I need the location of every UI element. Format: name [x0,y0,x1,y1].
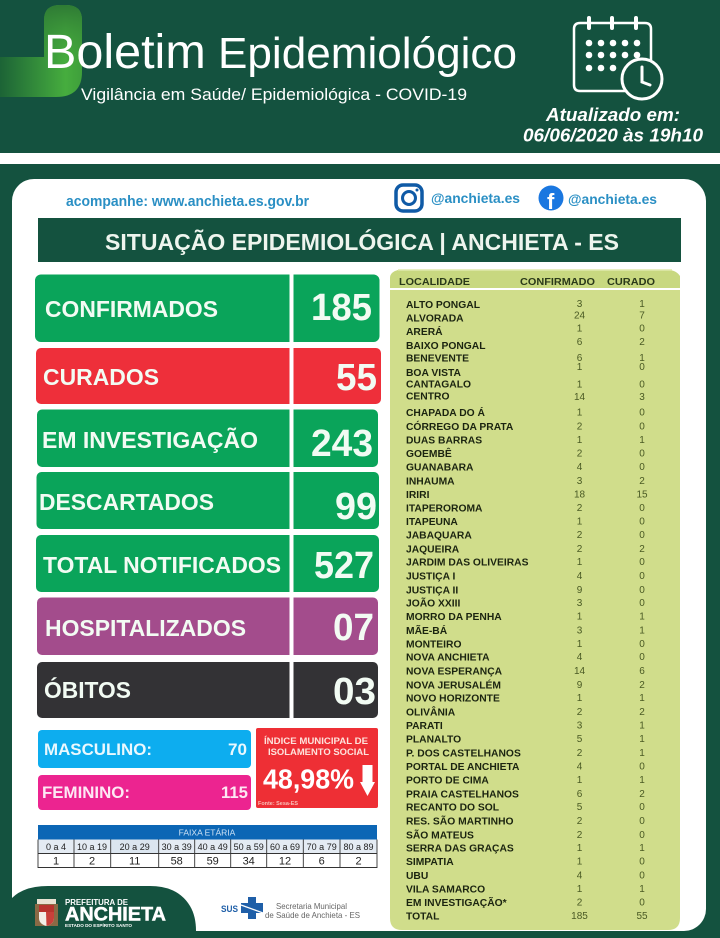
card: curados: CURADOS [43,364,159,390]
locality names: BOA VISTA [406,368,461,379]
age table: 59 [207,856,219,868]
cured counts: 1 [639,843,645,854]
locality names: NOVA ESPERANÇA [406,667,503,678]
confirmed counts: 2 [577,530,583,541]
locality names: P. DOS CASTELHANOS [406,748,521,759]
locality names: PORTAL DE ANCHIETA [406,762,520,773]
gender: masculino: MASCULINO: [44,740,152,759]
confirmed counts: 1 [577,693,583,704]
locality names: DUAS BARRAS [406,435,482,446]
confirmed counts: 3 [577,720,583,732]
callout: social isolation index: ÍNDICE MUNICIPAL DE [264,736,368,747]
gender: masculino: 70 [228,740,247,759]
locality names: ITAPEUNA [406,517,458,528]
locality names: RES. SÃO MARTINHO [406,814,514,827]
age table: 60 a 69 [270,842,300,852]
card: curados [36,348,381,404]
table: cases by locality [390,270,680,930]
icon: instagram [396,185,422,211]
locality names: ALTO PONGAL [406,300,480,311]
cured counts: 1 [639,748,645,759]
table header [399,276,655,288]
confirmed counts: 5 [577,734,583,745]
locality names: PLANALTO [406,735,461,746]
card: hospitalizados [37,597,378,655]
card: confirmados: CONFIRMADOS [45,296,218,322]
cured counts: 0 [639,585,645,596]
confirmed counts: 6 [577,337,583,348]
age table: 30 a 39 [162,842,192,852]
cured counts: 1 [639,734,645,745]
card: hospitalizados: HOSPITALIZADOS [45,615,246,641]
confirmed counts: 1 [577,639,583,650]
cured counts: 3 [639,392,645,403]
table header: LOCALIDADE [399,276,470,288]
cured counts: 0 [639,462,645,473]
locality names: NOVA JERUSALÉM [406,678,501,691]
locality names: JAQUEIRA [406,544,460,555]
confirmed counts: 4 [577,870,583,882]
confirmed counts: 1 [577,557,583,568]
card: descartados [36,472,379,529]
cured counts: 1 [639,435,645,446]
locality names: ARERÁ [406,325,443,338]
locality names: CÓRREGO DA PRATA [406,420,514,433]
icon: facebook [538,186,564,214]
locality names: EM INVESTIGAÇÃO* [406,896,507,909]
cured counts: 0 [639,422,645,432]
header band [0,0,720,164]
callout: social isolation index: ISOLAMENTO SOCIAL [268,747,369,758]
cured counts: 55 [636,911,648,922]
locality names: TOTAL [406,912,439,923]
age table: 34 [243,856,255,868]
cured counts: 0 [639,571,645,582]
confirmed counts: 9 [577,680,583,691]
confirmed counts: 9 [577,585,583,596]
age table: 10 a 19 [77,842,107,852]
gender: feminino [38,775,251,810]
locality names: NOVO HORIZONTE [406,693,500,704]
cured counts: 1 [639,693,645,704]
cured counts: 0 [639,816,645,827]
confirmed counts: 4 [577,462,583,473]
cured counts [636,299,648,922]
gender: feminino: FEMININO: [42,783,130,802]
cured counts: 7 [639,310,645,322]
age table: 80 a 89 [343,842,374,852]
locality names: PRAIA CASTELHANOS [406,789,519,800]
card: total notificados: TOTAL NOTIFICADOS [43,552,281,578]
subtitle: Vigilância em Saúde/ Epidemiológica - COVID-19 [81,86,467,104]
locality names: RECANTO DO SOL [406,803,499,814]
confirmed counts: 3 [577,598,583,609]
confirmed counts: 1 [577,884,583,895]
confirmed counts: 4 [577,762,583,772]
confirmed counts: 2 [577,898,583,908]
locality names: JABAQUARA [406,530,472,541]
confirmed counts [571,299,588,922]
cured counts: 0 [639,598,645,609]
prefeitura wordmark: ANCHIETA [65,904,166,926]
cured counts: 0 [639,639,645,650]
confirmed counts: 14 [574,666,585,677]
card: óbitos: ÓBITOS [44,676,131,703]
sus logo and health secretariat: SUS [221,904,238,914]
sus logo and health secretariat: de Saúde de Anchieta - ES [265,910,360,920]
confirmed counts: 1 [577,380,583,390]
locality names: GOEMBÊ [406,447,452,460]
locality names: MÃE-BÁ [406,624,448,637]
confirmed counts: 6 [577,353,583,364]
locality names: CENTRO [406,391,449,402]
confirmed counts: 3 [577,299,583,310]
locality names: CHAPADA DO Á [406,406,486,419]
prefeitura wordmark [65,898,166,928]
age table: 58 [171,856,183,868]
cured counts: 1 [639,612,645,622]
confirmed counts: 24 [574,310,585,322]
confirmed counts: 5 [577,802,583,813]
confirmed counts: 1 [577,362,583,373]
locality names: MONTEIRO [406,639,462,650]
callout: social isolation index [256,728,378,808]
confirmed counts: 1 [577,856,583,868]
locality names: NOVA ANCHIETA [406,653,490,664]
confirmed counts: 185 [571,911,588,922]
confirmed counts: 2 [577,448,583,460]
card: confirmados [35,274,380,342]
confirmed counts: 2 [577,816,583,827]
cured counts: 0 [639,448,645,460]
confirmed counts: 1 [577,843,583,854]
gender: feminino: 115 [221,783,248,802]
cured counts: 0 [639,530,645,541]
green logo shape [0,5,82,97]
cured counts: 2 [639,707,645,718]
locality names [406,300,529,923]
age table: 6 [319,856,325,868]
callout: social isolation index: Fonte: Sesa-ES [258,801,299,807]
cured counts: 0 [639,870,645,882]
cured counts: 0 [639,516,645,528]
cured counts: 1 [639,299,645,310]
confirmed counts: 4 [577,571,583,582]
card: em investigação: EM INVESTIGAÇÃO [42,426,258,453]
locality names: MORRO DA PENHA [406,612,502,623]
age table: 2 [355,856,362,868]
confirmed counts: 2 [577,748,583,759]
title [44,25,517,79]
cured counts: 2 [639,789,645,800]
age table: 0 a 4 [46,842,66,852]
age table: FAIXA ETÁRIA [179,828,236,838]
confirmed counts: 2 [577,707,583,718]
confirmed counts: 3 [577,476,583,487]
locality names: SERRA DAS GRAÇAS [406,844,514,855]
update date: 06/06/2020 às 19h10 [523,124,704,146]
card: óbitos [37,662,378,718]
confirmed counts: 2 [577,422,583,432]
card: descartados: 99 [335,486,377,528]
prefeitura wordmark: ESTADO DO ESPÍRITO SANTO [65,921,133,928]
cured counts: 0 [639,856,645,868]
instagram handle: @anchieta.es [431,190,520,206]
card: em investigação: 243 [311,423,373,465]
cured counts: 0 [639,362,645,373]
icon: calendar with clock [574,18,662,99]
locality names: JARDIM DAS OLIVEIRAS [406,558,529,569]
locality names: BAIXO PONGAL [406,341,486,352]
locality names: INHAUMA [406,476,455,487]
update date [523,104,704,146]
locality names: JUSTIÇA II [406,585,458,596]
section title bar: SITUAÇÃO EPIDEMIOLÓGICA | ANCHIETA - ES [105,228,619,255]
card: curados: 55 [336,357,377,399]
cured counts: 2 [639,680,645,691]
confirmed counts: 18 [574,490,585,500]
locality names: PORTO DE CIMA [406,775,489,786]
title: Epidemiológico [218,29,517,78]
age table: 12 [279,856,291,868]
age table: 1 [53,856,59,868]
locality names: CANTAGALO [406,379,471,390]
locality names: OLIVÂNIA [406,706,456,719]
sus logo and health secretariat: Secretaria Municipal [276,901,347,911]
locality names: PARATI [406,721,443,732]
confirmed counts: 4 [577,652,583,663]
locality names: SÃO MATEUS [406,828,474,841]
locality names: SIMPATIA [406,857,454,868]
confirmed counts: 1 [577,612,583,622]
card: óbitos: 03 [333,671,376,713]
confirmed counts: 1 [577,324,583,334]
cured counts: 1 [639,720,645,732]
locality names: GUANABARA [406,463,474,474]
confirmed counts: 1 [577,408,583,418]
cured counts: 0 [639,503,645,514]
cured counts: 1 [639,626,645,636]
gender: masculino [38,730,251,768]
age table: 20 a 29 [120,842,150,852]
age table: 70 a 79 [307,842,337,852]
cured counts: 0 [639,762,645,772]
stat cards [35,274,381,718]
confirmed counts: 2 [577,503,583,514]
cured counts: 2 [639,544,645,555]
age table [38,825,377,868]
icon: coat of arms [35,899,58,926]
cured counts: 0 [639,802,645,813]
white content panel [12,179,706,931]
card: confirmados: 185 [311,287,372,329]
follow line [66,185,657,214]
locality names: UBU [406,871,428,882]
cured counts: 0 [639,557,645,568]
cured counts: 6 [639,666,645,677]
cured counts: 1 [639,884,645,895]
cured counts: 0 [639,898,645,908]
card: em investigação [37,409,378,467]
cured counts: 15 [636,490,648,500]
locality names: JOÃO XXIII [406,597,460,610]
table header: CURADO [607,276,655,288]
icon: facebook: f [547,189,555,214]
confirmed counts: 1 [577,516,583,528]
confirmed counts: 2 [577,544,583,555]
cured counts: 2 [639,476,645,487]
title: Boletim [44,25,206,79]
locality names: JUSTIÇA I [406,571,456,582]
website link: acompanhe: www.anchieta.es.gov.br [66,193,309,210]
table header: CONFIRMADO [520,276,595,288]
locality names: VILA SAMARCO [406,884,485,895]
age table: 11 [129,856,140,868]
confirmed counts: 2 [577,830,583,841]
cured counts: 1 [639,353,645,364]
card: descartados: DESCARTADOS [39,489,214,515]
prefeitura wordmark: PREFEITURA DE [65,898,129,907]
confirmed counts: 6 [577,789,583,800]
section title bar [38,218,681,262]
facebook handle: @anchieta.es [568,191,657,207]
cured counts: 0 [639,324,645,334]
locality names: ITAPEROROMA [406,504,483,515]
age table: 2 [89,856,95,868]
locality names: BENEVENTE [406,354,469,365]
cured counts: 0 [639,652,645,663]
locality names: ALVORADA [406,314,464,325]
confirmed counts: 1 [577,435,583,446]
footer tab: prefeitura de anchieta [12,886,196,931]
age table: 50 a 59 [234,842,264,852]
cured counts: 2 [639,337,645,348]
confirmed counts: 3 [577,626,583,636]
callout: social isolation index: 48,98% [263,764,354,794]
update date: Atualizado em: [545,104,680,125]
confirmed counts: 14 [574,392,585,403]
confirmed counts: 1 [577,775,583,786]
cured counts: 0 [639,830,645,841]
cured counts: 0 [639,380,645,390]
card: hospitalizados: 07 [333,607,374,649]
card: total notificados [36,535,379,592]
age table: 40 a 49 [198,842,228,852]
cured counts: 1 [639,775,645,786]
sus logo and health secretariat [221,897,360,920]
card: total notificados: 527 [314,545,374,587]
cured counts: 0 [639,408,645,418]
locality names: IRIRI [406,490,430,501]
